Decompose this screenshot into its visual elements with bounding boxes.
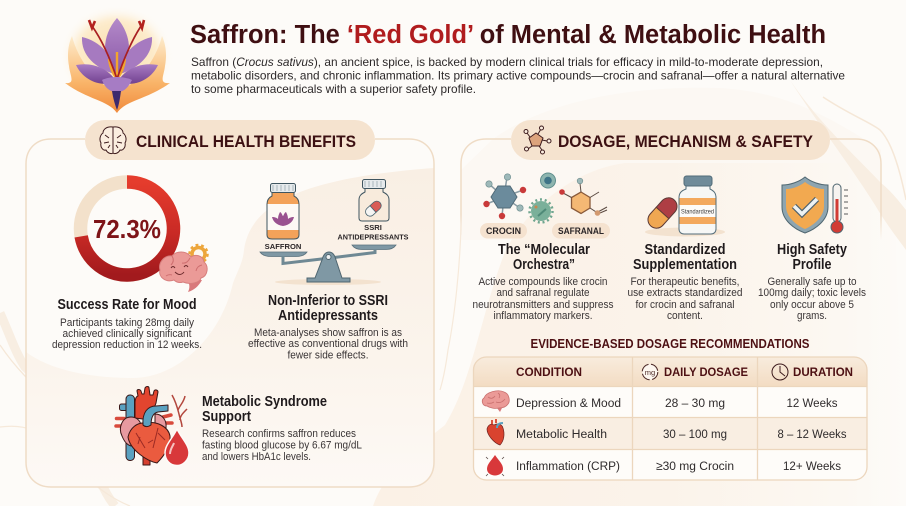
text: the molecular orchestra	[472, 242, 614, 322]
text: success rate for mood: achieved clinically significant	[62, 328, 192, 340]
text: standardized supplementation: content.	[667, 310, 703, 322]
row: inflammation: ≥30 mg Crocin	[656, 459, 734, 473]
row: metabolic health	[487, 419, 846, 445]
table: dosage recommendations	[474, 357, 867, 480]
icon: brain	[482, 391, 509, 412]
section heading: dosage, mechanism and safety: DOSAGE, MECHANISM & SAFETY	[558, 133, 813, 151]
text: the molecular orchestra: and safranal regulate	[496, 287, 590, 299]
icon: blood drop with sparks	[486, 455, 504, 476]
label: safranal	[552, 223, 610, 238]
text: high safety profile: High Safety	[777, 242, 847, 258]
text: the molecular orchestra: neurotransmitters and suppress	[472, 299, 614, 311]
intro text	[191, 55, 845, 96]
intro text: Saffron (Crocus sativus), an ancient spice, is backed by modern clinical trials for efficacy in mild-to-moderate depression,	[191, 55, 823, 69]
section heading: dosage, mechanism and safety	[511, 120, 830, 160]
icon: standardized bottle and capsule	[644, 176, 725, 236]
text: non-inferior to SSRI antidepressants: Non-Inferior to SSRI	[268, 293, 388, 309]
section heading: clinical health benefits	[85, 120, 375, 160]
text: success rate for mood	[52, 297, 202, 351]
heading: evidence-based dosage recommendations: EVIDENCE-BASED DOSAGE RECOMMENDATIONS	[530, 337, 810, 351]
row: metabolic health: 8 – 12 Weeks	[778, 427, 846, 441]
icon: balance scale with saffron and SSRI bottles	[260, 180, 408, 285]
text: high safety profile: only occur above 5	[770, 299, 854, 311]
text: non-inferior to SSRI antidepressants: fewer side effects.	[288, 350, 368, 362]
text: the molecular orchestra: The “Molecular	[498, 242, 590, 258]
text: high safety profile: 100mg daily; toxic levels	[758, 287, 867, 299]
intro text: metabolic disorders, and chronic inflammation. Its primary active compounds—crocin and safranal—offer a natural alternative	[191, 68, 845, 82]
title: Saffron: The ‘Red Gold’ of Mental & Metabolic Health	[190, 21, 826, 49]
table header	[516, 364, 853, 380]
icon: molecule	[524, 126, 551, 154]
text: high safety profile	[758, 242, 867, 322]
text: the molecular orchestra: inflammatory markers.	[494, 310, 592, 322]
icon: mg dose	[642, 364, 658, 380]
label: SSRI antidepressants	[338, 223, 408, 242]
row: inflammation: Inflammation (CRP)	[516, 459, 620, 473]
text: metabolic syndrome support	[202, 394, 362, 463]
row: depression and mood: 28 – 30 mg	[665, 396, 725, 410]
text: high safety profile: Generally safe up to	[768, 276, 856, 288]
row: inflammation: 12+ Weeks	[783, 459, 841, 473]
donut chart: 72.3%	[80, 182, 174, 275]
text: high safety profile: grams.	[797, 310, 827, 322]
section heading: clinical health benefits: CLINICAL HEALTH BENEFITS	[136, 133, 356, 151]
label: safranal: SAFRANAL	[558, 226, 605, 236]
label: crocin	[480, 223, 527, 238]
table header: DAILY DOSAGE	[664, 365, 748, 379]
text: the molecular orchestra: Orchestra”	[513, 257, 575, 273]
text: success rate for mood: Participants taking 28mg daily	[60, 317, 195, 329]
text: standardized supplementation	[628, 242, 742, 322]
icon: heart and blood drop	[116, 386, 189, 466]
label: SSRI antidepressants: ANTIDEPRESSANTS	[338, 232, 408, 242]
icon: clock	[772, 364, 788, 380]
text: standardized supplementation: for crocin and safranal	[636, 299, 734, 311]
text: non-inferior to SSRI antidepressants: Meta-analyses show saffron is as	[254, 327, 403, 339]
label: saffron: SAFFRON	[265, 242, 301, 251]
row: depression and mood: Depression & Mood	[516, 396, 621, 410]
donut chart: 72.3%: 72.3%	[93, 214, 161, 244]
text: metabolic syndrome support: Support	[202, 409, 251, 425]
text: metabolic syndrome support: Metabolic Syndrome	[202, 394, 327, 410]
text: non-inferior to SSRI antidepressants	[248, 293, 408, 362]
label: crocin: CROCIN	[486, 226, 521, 236]
table header: CONDITION	[516, 365, 582, 379]
text: standardized supplementation: For therapeutic benefits,	[630, 276, 740, 288]
text: standardized supplementation: Supplementation	[633, 257, 737, 273]
table header: DURATION	[793, 365, 853, 379]
text: standardized supplementation: Standardized	[644, 242, 726, 258]
icon: shield and thermometer	[782, 177, 848, 233]
text: metabolic syndrome support: Research confirms saffron reduces	[202, 428, 357, 440]
panel: clinical health benefits	[26, 120, 434, 487]
icon: saffron flower	[60, 6, 172, 113]
icon: mg dose: mg	[645, 368, 655, 377]
row: metabolic health: Metabolic Health	[516, 427, 607, 441]
text: metabolic syndrome support: and lowers HbA1c levels.	[202, 451, 311, 463]
icon: heart	[487, 419, 504, 445]
text: non-inferior to SSRI antidepressants: Antidepressants	[278, 308, 378, 324]
icon: brain outline	[100, 127, 126, 154]
text: standardized supplementation: use extracts standardized	[628, 287, 742, 299]
icon: SSRI bottle	[359, 180, 389, 221]
panel: dosage, mechanism and safety	[440, 120, 881, 480]
icon: saffron bottle	[267, 184, 299, 239]
text: the molecular orchestra: Active compounds like crocin	[478, 276, 608, 288]
row: depression and mood: 12 Weeks	[786, 396, 838, 410]
text: metabolic syndrome support: fasting blood glucose by 6.67 mg/dL	[202, 440, 362, 452]
icon: happy brain with gear	[160, 245, 208, 292]
text: success rate for mood: Success Rate for Mood	[58, 297, 196, 313]
icon: standardized bottle and capsule: Standardized	[681, 208, 715, 216]
label: SSRI antidepressants: SSRI	[364, 223, 382, 232]
intro text: to some pharmaceuticals with a superior safety profile.	[191, 82, 476, 96]
text: non-inferior to SSRI antidepressants: effective as conventional drugs with	[248, 338, 408, 350]
text: high safety profile: Profile	[792, 257, 832, 273]
text: success rate for mood: depression reduction in 12 weeks.	[52, 339, 202, 351]
row: depression and mood	[482, 391, 838, 412]
icon: crocin and safranal molecules	[483, 173, 607, 222]
row: metabolic health: 30 – 100 mg	[663, 427, 727, 441]
row: inflammation	[486, 455, 841, 476]
